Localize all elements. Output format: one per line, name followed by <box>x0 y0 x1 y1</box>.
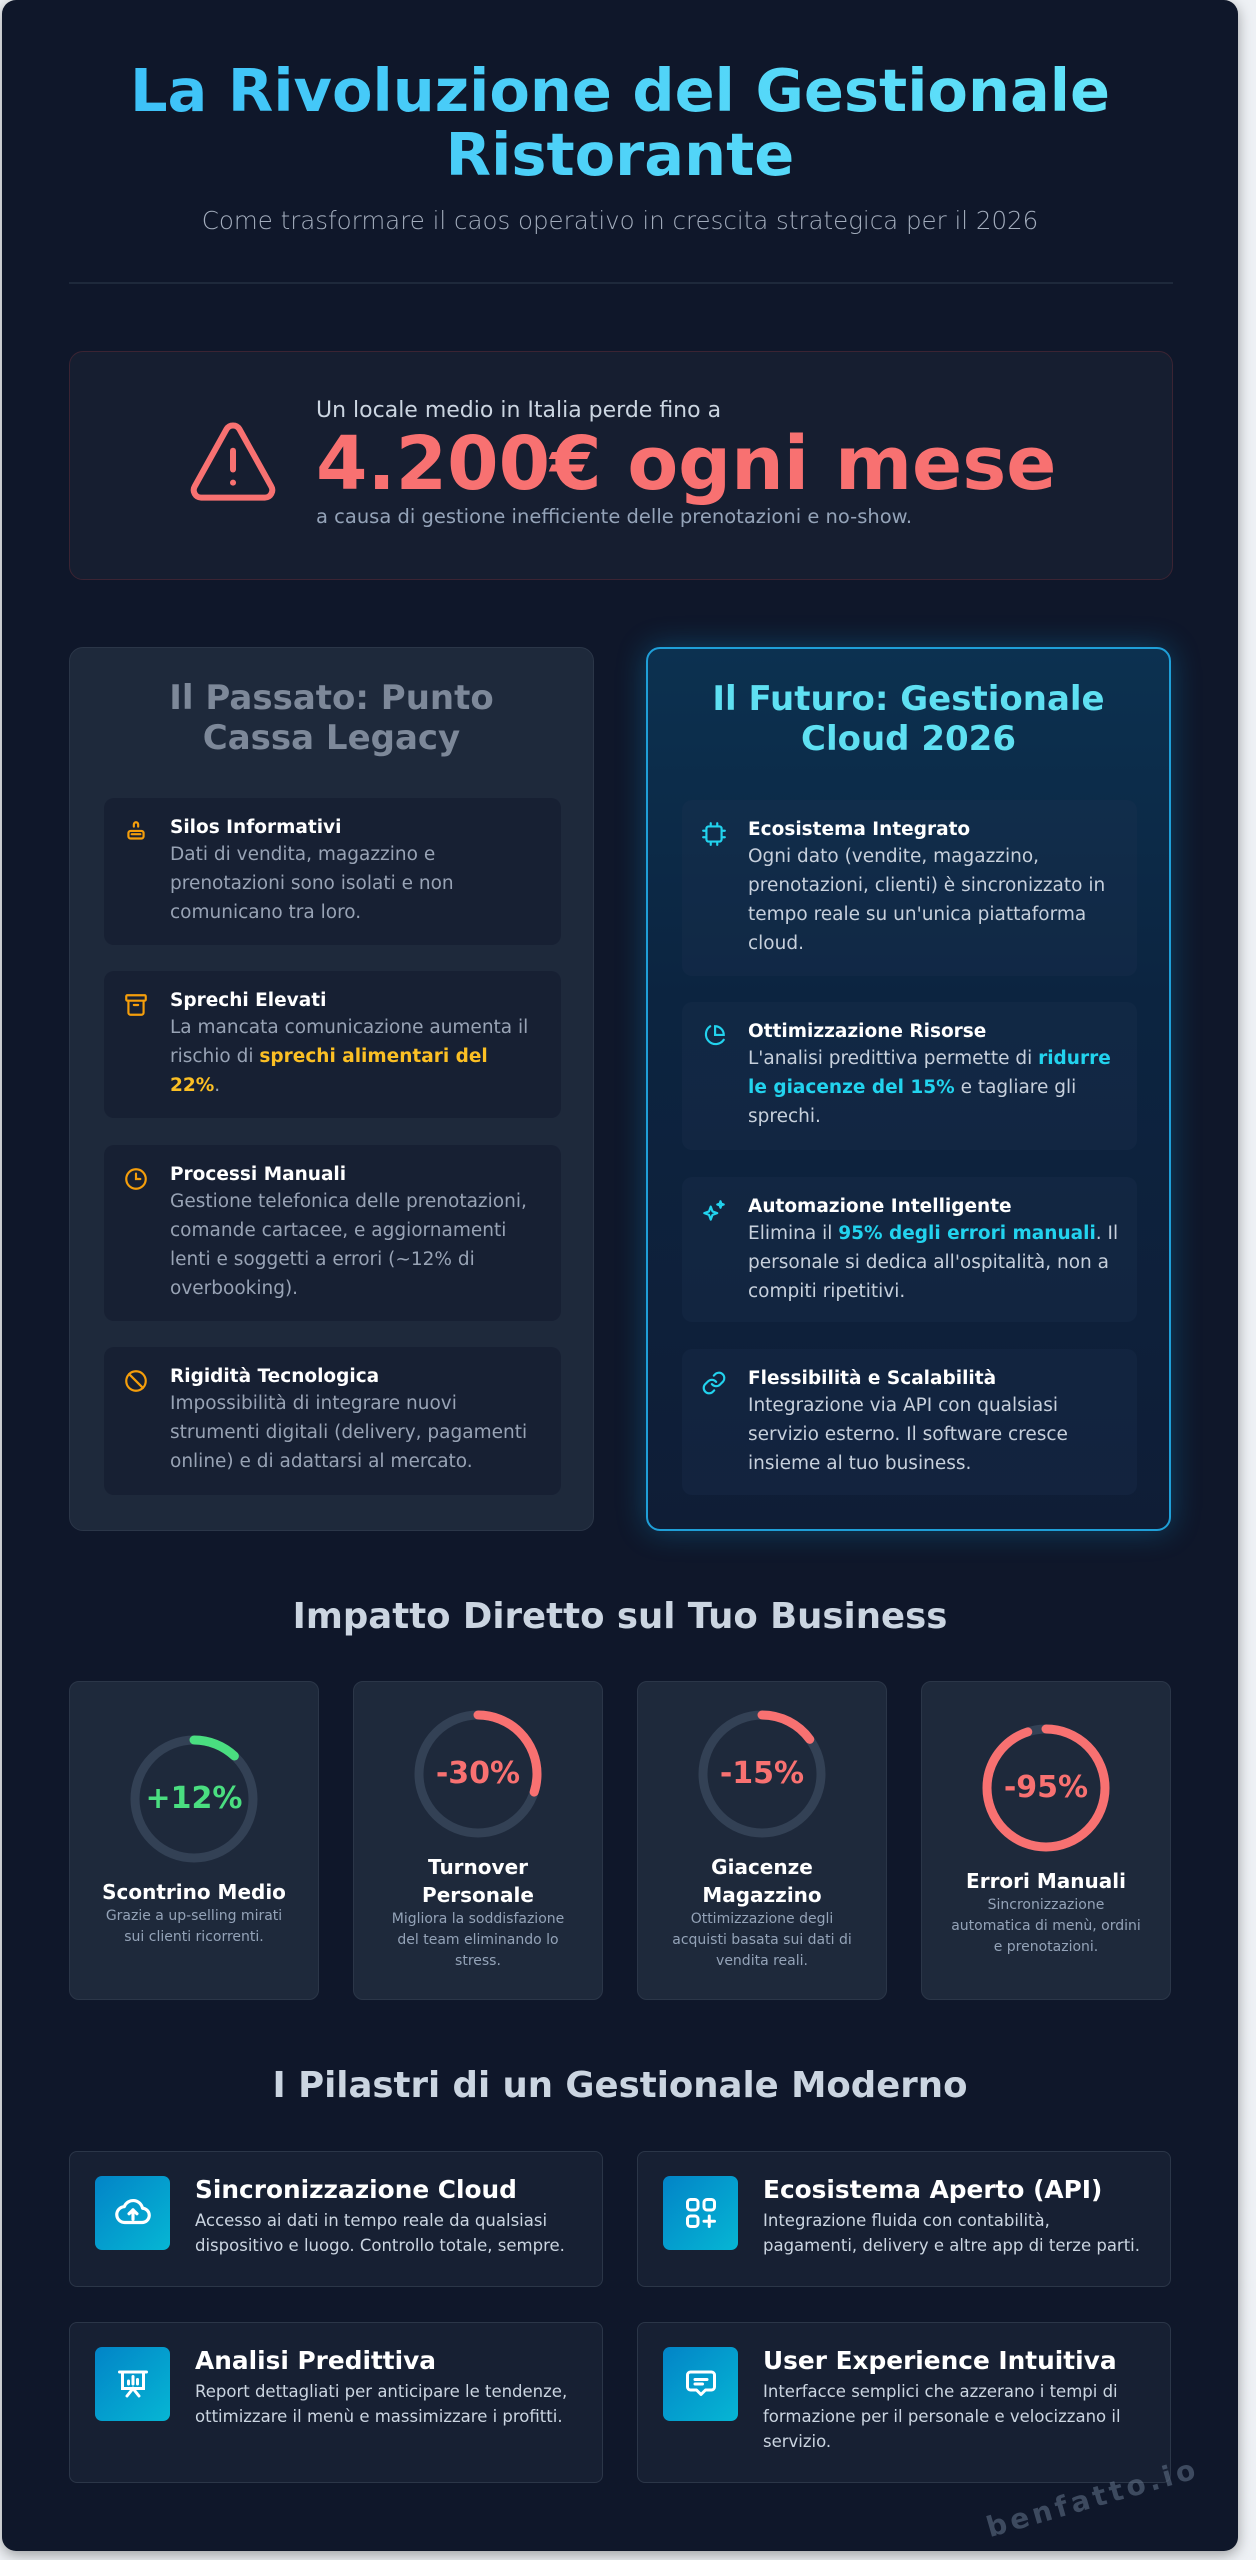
heading: past: Cassa Legacy <box>203 718 460 758</box>
alert text <box>316 398 1056 528</box>
icon: apps <box>663 2176 738 2250</box>
item: flessibilita <box>682 1349 1137 1495</box>
item: processi: Gestione telefonica delle prenotazioni, comande cartacee, e aggiornamenti lenti e soggetti a errori (~12% di overbooking). <box>170 1191 527 1299</box>
item: ottimizzazione: L'analisi predittiva permette di ridurre le giacenze del 15% e tagliare gli sprechi. <box>748 1048 1111 1127</box>
item: ecosistema <box>682 800 1137 976</box>
pillar: api: Integrazione fluida con contabilità, <box>763 2211 1050 2230</box>
alert text: 4.200€ ogni mese <box>316 421 1056 507</box>
stat: giacenze: Giacenze Magazzino <box>702 1855 822 1907</box>
heading: pilastri: I Pilastri di un Gestionale Moderno <box>273 2065 967 2106</box>
item: flessibilita: Integrazione via API con qualsiasi servizio esterno. Il software cresce insieme al tuo business. <box>748 1395 1068 1474</box>
ring chart +12%: +12% <box>146 1780 242 1816</box>
pillar: cloud: Sincronizzazione Cloud <box>195 2175 517 2204</box>
item: automazione <box>682 1177 1137 1322</box>
watermark: benfatto.io <box>983 2452 1203 2544</box>
item: ecosistema: Ecosistema Integrato <box>748 819 970 840</box>
item: flessibilita: Flessibilità e Scalabilità <box>748 1368 996 1389</box>
heading: past: Il Passato: Punto <box>169 678 494 718</box>
pillar: ux: User Experience Intuitiva <box>763 2346 1117 2375</box>
ring chart +12% <box>130 1736 258 1862</box>
stat: scontrino: Grazie a up-selling mirati sui clienti ricorrenti. <box>106 1908 282 1944</box>
item: silos <box>104 798 561 945</box>
item: silos: Silos Informativi <box>170 817 341 838</box>
ring chart -30%: -30% <box>436 1756 520 1791</box>
item: automazione: Automazione Intelligente <box>748 1196 1012 1217</box>
pillar: ux: Interfacce semplici che azzerano i tempi di formazione per il personale e velocizzano il servizio. <box>763 2382 1121 2451</box>
stat: turnover: Turnover Personale <box>422 1855 534 1907</box>
pillar: api: Ecosistema Aperto (API) <box>763 2175 1102 2204</box>
subtitle: Come trasformare il caos operativo in crescita strategica per il 2026 <box>202 206 1038 235</box>
pillar: analisi: Analisi Predittiva <box>195 2346 436 2375</box>
panel: future <box>646 647 1171 1531</box>
alert callout <box>69 351 1173 580</box>
stat: turnover <box>353 1681 603 2000</box>
pillar: cloud: Accesso ai dati in tempo reale da qualsiasi dispositivo e luogo. Controllo totale, sempre. <box>195 2211 565 2255</box>
item: ottimizzazione: Ottimizzazione Risorse <box>748 1021 986 1042</box>
pillar: cloud <box>69 2151 603 2287</box>
stat: errori <box>921 1681 1171 2000</box>
ring chart -15% <box>698 1710 826 1838</box>
pillar: analisi <box>69 2322 603 2483</box>
ring chart -95%: -95% <box>1004 1770 1088 1805</box>
item: rigidita <box>104 1347 561 1495</box>
item: sprechi: Sprechi Elevati <box>170 990 326 1011</box>
stat: scontrino <box>69 1681 319 2000</box>
item: sprechi: La mancata comunicazione aumenta il rischio di sprechi alimentari del 22%. <box>170 1017 528 1096</box>
heading: impatto: Impatto Diretto sul Tuo Business <box>293 1596 947 1637</box>
item: processi: Processi Manuali <box>170 1164 346 1185</box>
item: ecosistema: Ogni dato (vendite, magazzino, prenotazioni, clienti) è sincronizzato in tempo reale su un'unica piattaforma cloud. <box>748 846 1105 954</box>
pillar: analisi: Report dettagliati per anticipare le tendenze, ottimizzare il menù e massimizzare i profitti. <box>195 2382 567 2426</box>
panel: past <box>69 647 594 1531</box>
stat: turnover: Migliora la soddisfazione del team eliminando lo stress. <box>392 1911 564 1969</box>
item: rigidita: Impossibilità di integrare nuovi strumenti digitali (delivery, pagamenti online) e di adattarsi al mercato. <box>170 1393 527 1472</box>
heading: future: Cloud 2026 <box>801 719 1016 759</box>
icon: cloud <box>95 2176 170 2250</box>
title <box>2 59 1238 187</box>
item: processi <box>104 1145 561 1321</box>
stat: giacenze: Ottimizzazione degli acquisti basata sui dati di vendita reali. <box>672 1911 852 1969</box>
stat: errori: Sincronizzazione automatica di menù, ordini e prenotazioni. <box>951 1897 1141 1955</box>
item: ottimizzazione <box>682 1002 1137 1150</box>
alert text: Un locale medio in Italia perde fino a <box>316 398 721 423</box>
icon: chat <box>663 2347 738 2421</box>
pillar: api: pagamenti, delivery e altre app di terze parti. <box>763 2236 1140 2255</box>
item: rigidita: Rigidità Tecnologica <box>170 1366 379 1387</box>
stat: errori: Errori Manuali <box>966 1869 1126 1893</box>
heading: future: Il Futuro: Gestionale <box>712 679 1105 719</box>
heading: past <box>169 678 494 758</box>
item: sprechi <box>104 971 561 1118</box>
icon: warning <box>190 422 276 501</box>
pillar: api <box>637 2151 1171 2287</box>
ring chart -15%: -15% <box>720 1756 804 1791</box>
title: Ristorante <box>446 120 794 189</box>
heading: future <box>712 679 1105 759</box>
stat: giacenze <box>637 1681 887 2000</box>
item: automazione: Elimina il 95% degli errori manuali. Il personale si dedica all'ospitalità, non a compiti ripetitivi. <box>748 1223 1118 1302</box>
item: silos: Dati di vendita, magazzino e prenotazioni sono isolati e non comunicano tra loro. <box>170 844 454 923</box>
title: La Rivoluzione del Gestionale <box>130 56 1110 125</box>
ring chart -30% <box>414 1710 542 1838</box>
alert text: a causa di gestione inefficiente delle prenotazioni e no-show. <box>316 505 912 528</box>
ring chart -95% <box>982 1724 1110 1852</box>
pillar: ux <box>637 2322 1171 2483</box>
icon: chart board <box>95 2347 170 2421</box>
stat: scontrino: Scontrino Medio <box>102 1880 286 1904</box>
